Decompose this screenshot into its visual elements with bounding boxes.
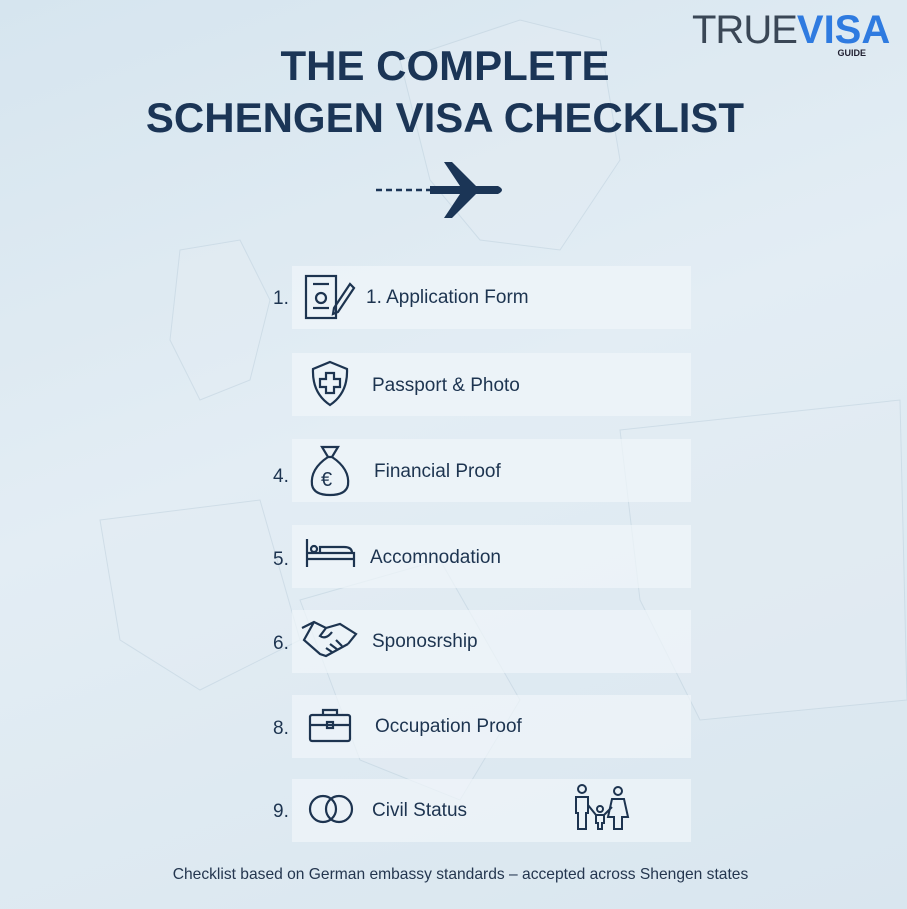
- title: THE COMPLETE: [280, 42, 610, 89]
- row 4: 5.: [273, 549, 289, 570]
- text: €: [321, 469, 332, 491]
- text: Financial Proof: [374, 461, 501, 482]
- row 5: 6.: [273, 633, 289, 654]
- logo: GUIDE: [837, 48, 866, 58]
- row 6: 8.: [273, 718, 289, 739]
- text: Accomnodation: [370, 547, 501, 568]
- row 1: 1.: [273, 288, 289, 309]
- row 7: 9.: [273, 801, 289, 822]
- icon: plane: [376, 162, 502, 218]
- icon: family: [575, 784, 630, 830]
- row 2: [292, 353, 691, 416]
- title: SCHENGEN VISA CHECKLIST: [146, 94, 744, 141]
- footer: Checklist based on German embassy standards – accepted across Shengen states: [173, 866, 748, 883]
- text: Civil Status: [372, 800, 467, 821]
- logo: TRUEVISA: [692, 8, 890, 52]
- text: Sponosrship: [372, 631, 478, 652]
- text: Occupation Proof: [375, 716, 522, 737]
- title: [146, 42, 744, 141]
- row 3: 4.: [273, 466, 289, 487]
- text: 1. Application Form: [366, 287, 529, 308]
- row 2: Passport & Photo: [372, 375, 520, 396]
